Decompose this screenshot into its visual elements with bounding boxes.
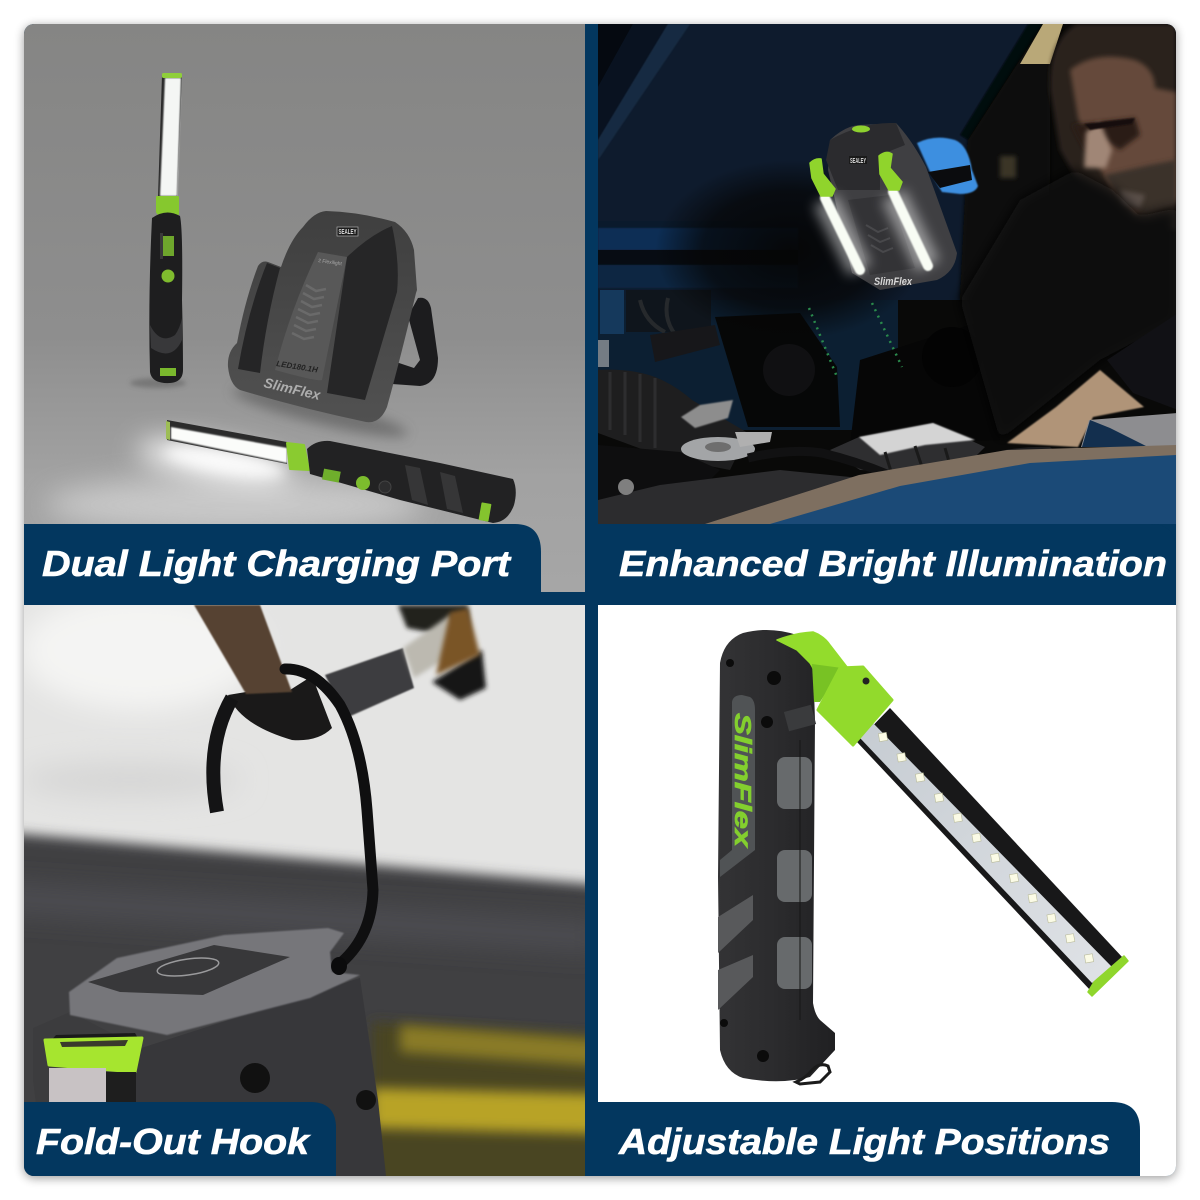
charging dock: 2 Flexilight — [318, 258, 343, 267]
standing inspection light — [130, 73, 186, 388]
glowing dual light dock: SlimFlex — [874, 276, 913, 288]
light bar — [857, 708, 1128, 996]
heading: enhanced bright illumination: Enhanced Bright Illumination — [619, 543, 1167, 584]
glowing dual light dock — [810, 123, 957, 290]
lying inspection light with glow — [135, 420, 516, 523]
product: articulated light — [718, 630, 1128, 1084]
dark halo around light — [662, 169, 898, 330]
light handle with green collar — [33, 928, 386, 1176]
panel: dual light charging photo — [24, 24, 585, 592]
panel: fold-out hook photo — [24, 605, 585, 1176]
banner backgrounds — [24, 524, 1176, 1176]
heading: dual light charging port: Dual Light Charging Port — [42, 543, 512, 584]
hook base — [331, 957, 347, 975]
SlimFlex logo: SlimFlex — [730, 713, 756, 849]
hook wire — [285, 669, 373, 962]
charging dock: SEALEY — [338, 229, 357, 236]
green dotted reflections — [809, 303, 902, 377]
blue glove — [917, 138, 978, 194]
engine bay panels — [598, 228, 898, 430]
glowing dual light dock: SEALEY — [850, 158, 866, 165]
charging dock: SlimFlex — [262, 374, 323, 403]
rusty tool and bar — [194, 605, 486, 812]
green hinge — [776, 631, 848, 669]
car wing — [705, 445, 1176, 524]
background wall — [958, 28, 1040, 299]
heading: fold-out hook: Fold-Out Hook — [36, 1121, 311, 1162]
charging dock — [228, 211, 438, 445]
charging dock: LED180.1H — [276, 359, 319, 375]
heading: adjustable light positions: Adjustable Light Positions — [618, 1121, 1110, 1162]
man's head and arm — [960, 24, 1178, 447]
engine hoses and radiator cap — [598, 370, 1060, 524]
panel: enhanced bright illumination photo — [598, 24, 1178, 524]
panel: adjustable positions product shot — [598, 605, 1176, 1176]
light glow — [825, 195, 928, 270]
handle body — [718, 630, 835, 1081]
hood — [598, 24, 1043, 300]
